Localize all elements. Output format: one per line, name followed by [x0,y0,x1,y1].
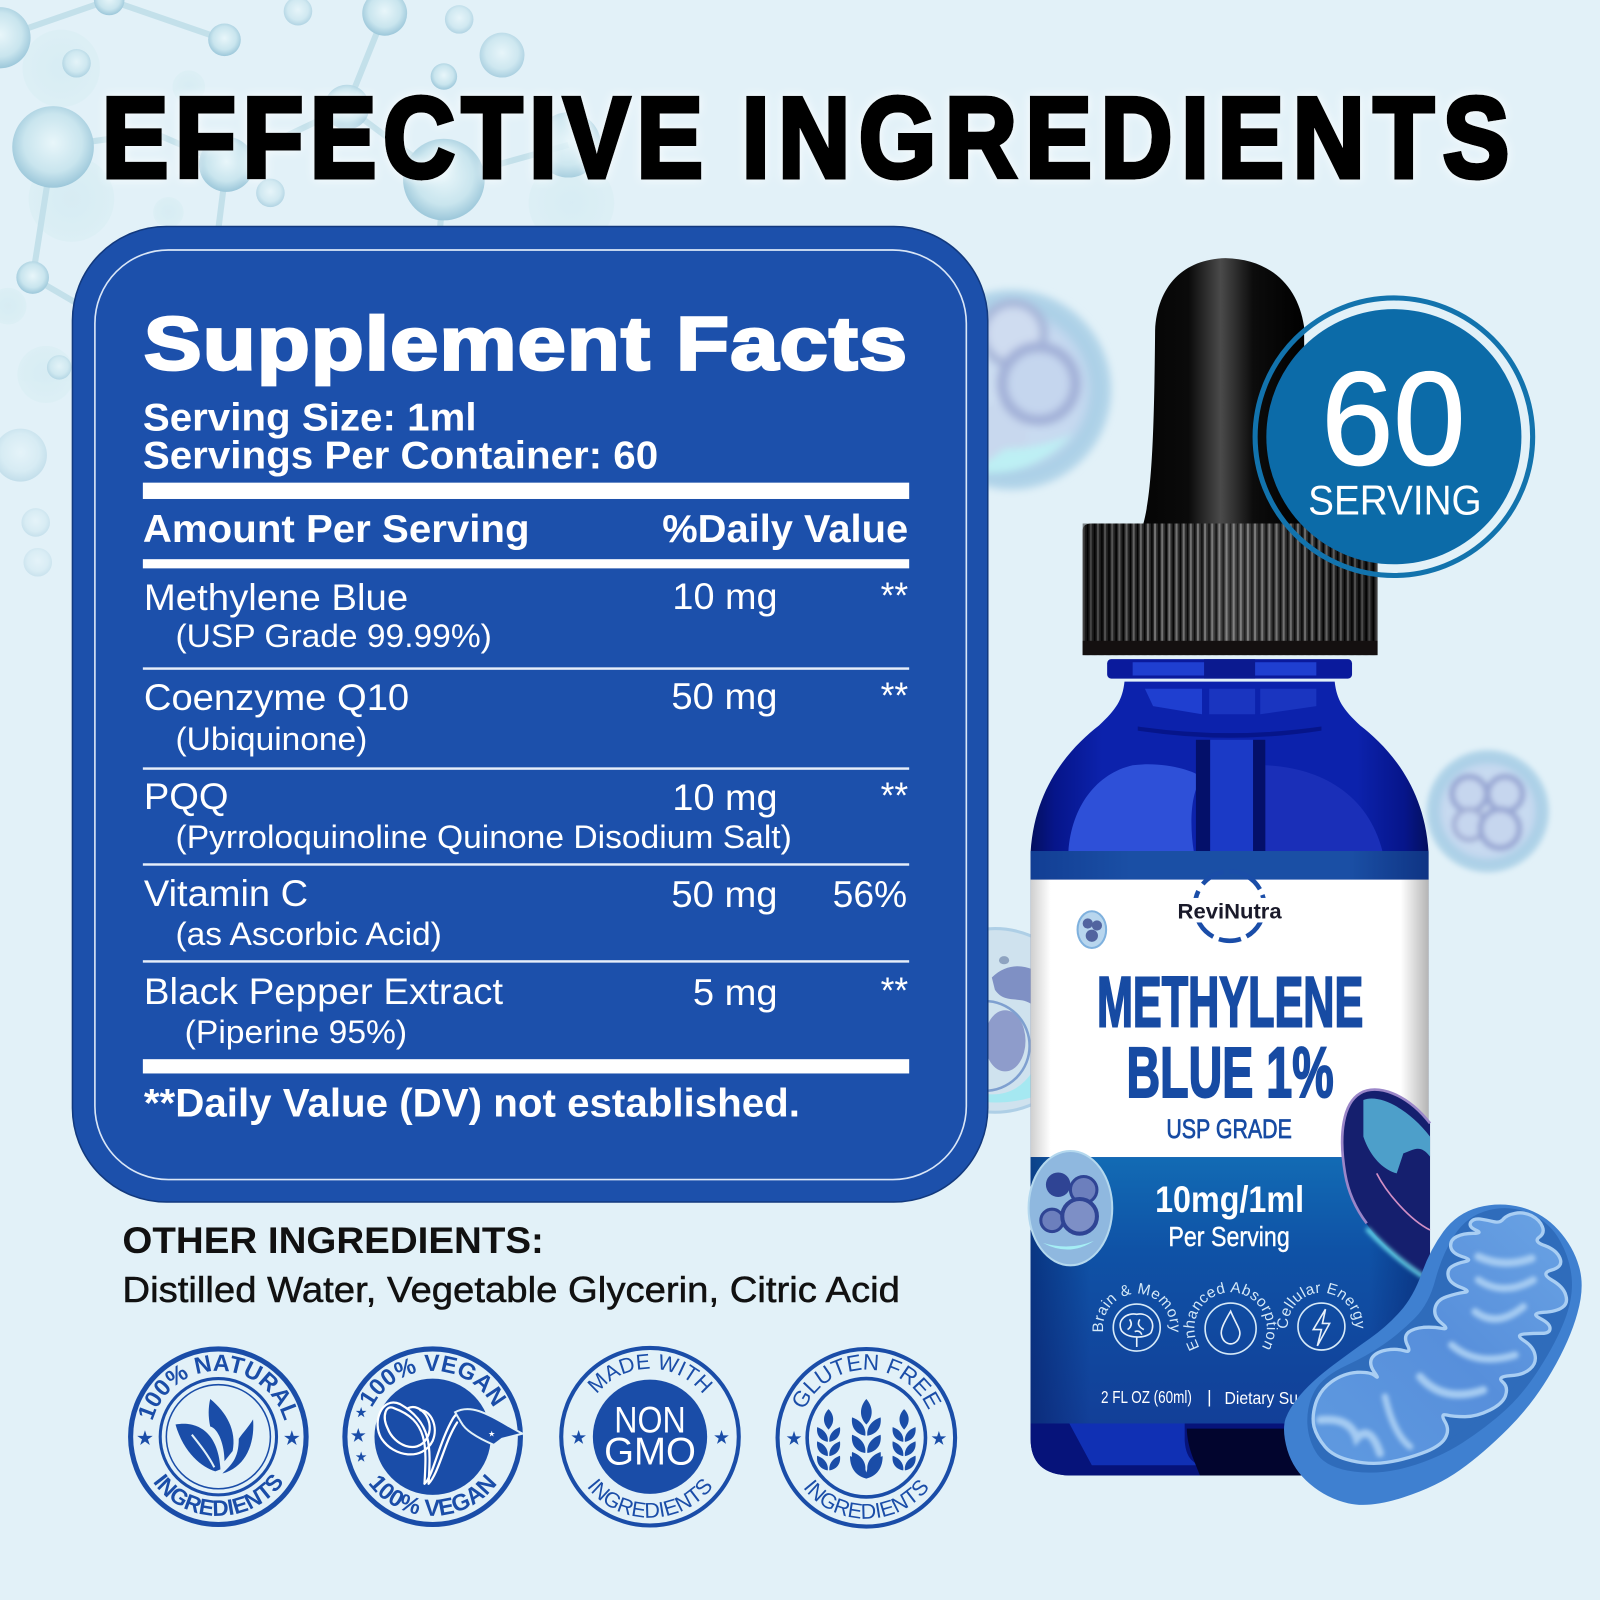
badge: 100% natural: INGREDIENTS [154,1474,282,1516]
logo: revinutra: ReviNutra [1178,899,1283,923]
other ingredients: OTHER INGREDIENTS: [122,1220,544,1261]
badge: 100% vegan: ★ [488,1430,495,1439]
badge: non gmo: INGREDIENTS [588,1478,712,1518]
badge: 100% natural: 100% NATURAL [139,1354,296,1420]
badge: 60 serving [1255,298,1533,576]
label footer text [1101,1387,1298,1408]
icon: purple mitochondrion [1342,1090,1430,1280]
row: pqq: PQQ [144,776,229,817]
badge: 100% vegan: ★ [356,1405,367,1419]
row: methylene blue [144,575,908,654]
row: coenzyme q10 [144,675,908,757]
row: methylene blue: Methylene Blue [144,577,408,618]
icon: cell on label [1029,1151,1112,1265]
row: black pepper extract: Black Pepper Extract [144,971,503,1012]
badge: non gmo [559,1346,741,1528]
badge: 100% natural: ★ [284,1428,300,1448]
serving information [143,397,658,477]
badge: non gmo: MADE WITH [587,1354,713,1394]
row: black pepper extract: ** [881,970,908,1011]
product name: BLUE 1% [1127,1033,1334,1113]
label footer text: Dietary Su [1224,1388,1298,1408]
title [102,74,1518,202]
row: coenzyme q10: 50 mg [671,676,778,717]
illustration: mitochondrion [1284,1205,1582,1505]
row: vitamin c: Vitamin C [144,873,308,914]
icon: small cell [1078,911,1106,948]
row: coenzyme q10: (Ubiquinone) [176,720,367,757]
badge: non gmo: GMO [604,1430,696,1473]
product name: METHYLENE [1097,963,1363,1043]
table header [143,483,909,568]
icon: wheat [817,1399,916,1479]
label footer text: | [1207,1387,1212,1407]
dosage [1155,1179,1304,1252]
badge: 100% vegan: ★ [351,1427,366,1445]
other ingredients [122,1220,900,1310]
central crista highlights [1320,1257,1533,1453]
badge: 100% natural [128,1346,309,1527]
cell behind panel and bottle [903,929,1087,1112]
icon: cellular energy [1277,1282,1364,1351]
footnote: **Daily Value (DV) not established. [144,1081,800,1125]
table header: %Daily Value [662,508,908,551]
row: black pepper extract: (Piperine 95%) [185,1013,407,1050]
serving information: Serving Size: 1ml [143,397,477,440]
molecule background decoration [0,0,614,577]
product name [1097,963,1363,1113]
label footer text: 2 FL OZ (60ml) [1101,1387,1192,1407]
serving count: 60 [1321,345,1465,493]
row: vitamin c [144,873,907,952]
glass body [1031,659,1429,1476]
dosage: 10mg/1ml [1155,1179,1304,1220]
bottle [1028,258,1431,1476]
badge: gluten free: ★ [931,1430,946,1448]
blurred cell decorations [911,290,1549,872]
heading: supplement facts: Supplement Facts [144,302,908,386]
row: coenzyme q10: ** [881,675,908,716]
row: methylene blue: ** [881,575,908,616]
serving label: SERVING [1308,476,1482,523]
panel inner border [95,250,966,1180]
icon: brain and memory [1092,1283,1179,1352]
icon: leaves [176,1399,253,1473]
icon: enhanced absorption: Enhanced Absorption [1183,1282,1278,1351]
logo: revinutra [1176,871,1284,941]
row: vitamin c: 56% [833,874,907,915]
row: methylene blue: 10 mg [672,576,778,617]
badge: gluten free: GLUTEN FREE [793,1354,942,1410]
icon: cellular energy: Cellular Energy [1277,1282,1364,1328]
other ingredients: Distilled Water, Vegetable Glycerin, Citric Acid [122,1270,900,1310]
badge: non gmo: ★ [571,1429,586,1447]
label [1028,851,1431,1424]
row: vitamin c: 50 mg [671,874,778,915]
panel: supplement facts [72,227,988,1202]
badge: 100% natural: ★ [137,1428,153,1448]
row: black pepper extract: 5 mg [693,972,778,1013]
dropper collar [1083,523,1378,655]
badge: 100% vegan: ★ [356,1450,367,1464]
title: INGREDIENTS [742,74,1518,202]
row: pqq: (Pyrroloquinoline Quinone Disodium Salt) [176,818,792,855]
row: methylene blue: (USP Grade 99.99%) [176,617,492,654]
badge: 100% vegan [342,1346,523,1527]
badge: non gmo: ★ [714,1429,729,1447]
inner wall [1312,1213,1567,1468]
title: EFFECTIVE [102,74,710,202]
serving information: Servings Per Container: 60 [143,434,658,477]
badge: gluten free: INGREDIENTS [804,1480,928,1519]
inner folded membrane [1313,1213,1567,1463]
badge: gluten free: ★ [787,1430,802,1448]
row: pqq: ** [881,775,908,816]
dropper bulb [1143,258,1305,526]
icon: brain and memory: Brain & Memory [1092,1283,1179,1332]
row: black pepper extract [144,970,908,1050]
row: pqq [144,775,908,855]
badge: 100% vegan: 100% VEGAN [360,1354,506,1407]
badge: gluten free [776,1347,958,1529]
outer membrane [1284,1205,1582,1505]
row: vitamin c: (as Ascorbic Acid) [176,915,442,952]
panel background [72,227,988,1202]
icon: script v with leaf [378,1403,496,1484]
row: pqq: 10 mg [672,777,778,818]
badge: 100% vegan: 100% VEGAN [368,1474,497,1516]
row: coenzyme q10: Coenzyme Q10 [144,677,409,718]
non gmo text: NON [614,1400,686,1441]
table header: Amount Per Serving [143,508,530,551]
usp grade: USP GRADE [1166,1114,1292,1144]
dosage: Per Serving [1168,1221,1290,1252]
